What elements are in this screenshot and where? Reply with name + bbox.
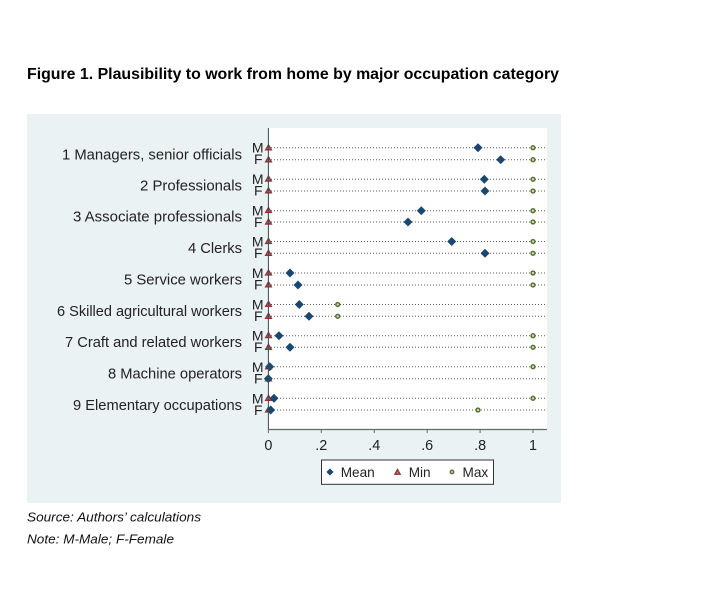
x axis with ticks and labels: 0	[264, 438, 272, 454]
x axis with ticks and labels: .6	[421, 438, 433, 454]
row: 6 Skilled agricultural workers: M	[252, 296, 264, 312]
row: 1 Managers, senior officials	[62, 140, 547, 167]
x axis with ticks and labels: .2	[315, 438, 327, 454]
row: 2 Professionals	[140, 171, 547, 198]
row: 4 Clerks	[188, 234, 547, 261]
row: 8 Machine operators	[108, 359, 547, 386]
title: Figure 1. Plausibility to work from home by major occupation category	[27, 66, 559, 83]
row: 1 Managers, senior officials: M	[252, 140, 264, 156]
legend: Min	[409, 465, 431, 480]
row: 5 Service workers	[124, 265, 547, 292]
row: 8 Machine operators: M	[252, 359, 264, 375]
row: 1 Managers, senior officials: 1 Managers, senior officials	[62, 148, 242, 164]
row: 2 Professionals: M	[252, 171, 264, 187]
row: 7 Craft and related workers: F	[254, 339, 262, 355]
row: 3 Associate professionals: M	[252, 202, 264, 218]
row: 3 Associate professionals: F	[254, 214, 262, 230]
row: 7 Craft and related workers: M	[252, 328, 264, 344]
source note: Source: Authors’ calculations	[27, 510, 202, 524]
row: 9 Elementary occupations: F	[254, 402, 262, 418]
row: 5 Service workers: M	[252, 265, 264, 281]
row: 6 Skilled agricultural workers: F	[254, 308, 262, 324]
row: 4 Clerks: M	[252, 234, 264, 250]
row: 6 Skilled agricultural workers	[57, 296, 547, 324]
panel: chart background	[27, 114, 561, 503]
row: 9 Elementary occupations: M	[252, 390, 264, 406]
legend: Mean	[341, 465, 375, 480]
x axis with ticks and labels	[264, 429, 547, 454]
x axis with ticks and labels: 1	[529, 438, 537, 454]
row: 4 Clerks: 4 Clerks	[188, 241, 242, 257]
row: 6 Skilled agricultural workers: 6 Skilled agricultural workers	[57, 304, 242, 320]
gender note: Note: M-Male; F-Female	[27, 532, 174, 546]
row: 3 Associate professionals	[73, 202, 547, 230]
row: 5 Service workers: 5 Service workers	[124, 273, 242, 289]
row: 3 Associate professionals: 3 Associate professionals	[73, 210, 242, 226]
legend	[322, 460, 494, 484]
row: 9 Elementary occupations	[73, 390, 547, 418]
y axis line	[267, 128, 269, 430]
chart: dot plot of plausibility by occupation	[57, 128, 547, 484]
row: 7 Craft and related workers	[65, 328, 547, 355]
row: 2 Professionals: 2 Professionals	[140, 179, 242, 195]
row: 5 Service workers: F	[254, 276, 262, 292]
row: 8 Machine operators: F	[254, 370, 262, 386]
row: 8 Machine operators: 8 Machine operators	[108, 366, 242, 382]
row: 7 Craft and related workers: 7 Craft and related workers	[65, 335, 242, 351]
x axis with ticks and labels: .4	[368, 438, 380, 454]
row: 1 Managers, senior officials: F	[254, 151, 262, 167]
x axis with ticks and labels: .8	[474, 438, 486, 454]
row: 4 Clerks: F	[254, 245, 262, 261]
plot area	[268, 128, 547, 429]
row: 2 Professionals: F	[254, 182, 262, 198]
legend: Max	[462, 465, 488, 480]
row: 9 Elementary occupations: 9 Elementary occupations	[73, 398, 242, 414]
